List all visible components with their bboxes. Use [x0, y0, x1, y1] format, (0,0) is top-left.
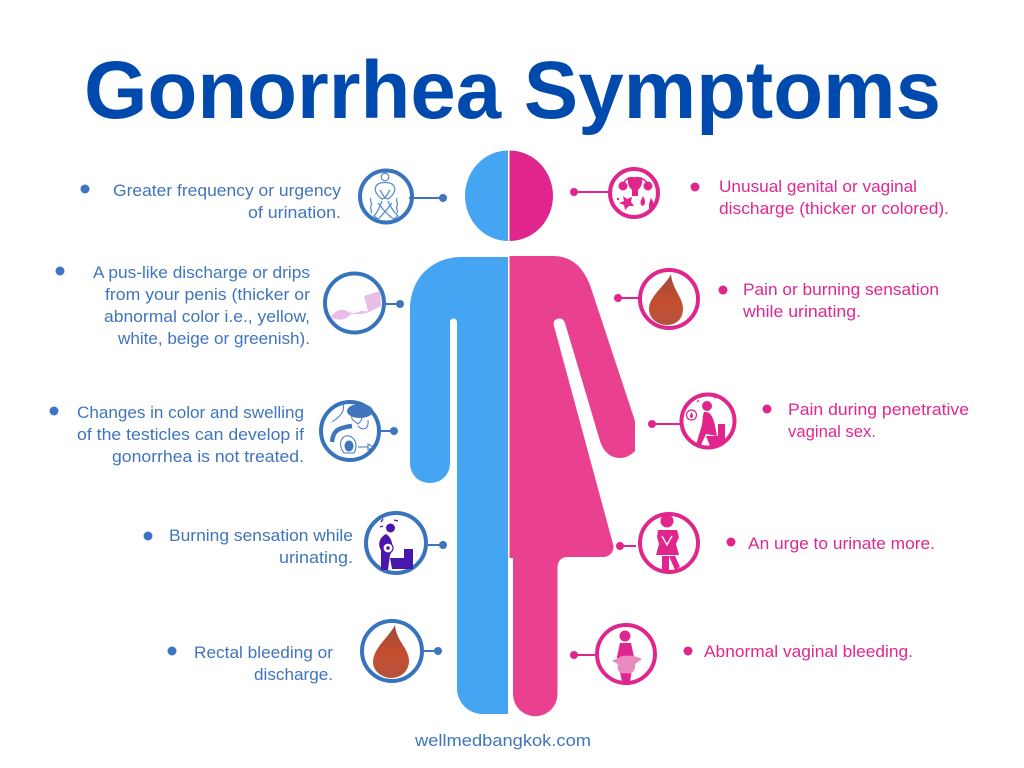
bullet text: vaginal discharge: discharge (thicker or colored).	[719, 199, 949, 218]
title: Gonorrhea Symptoms	[84, 45, 941, 136]
bullet text: urination frequency	[80, 181, 342, 222]
icon: woman on toilet	[648, 394, 734, 448]
bullet text: abnormal bleeding: Abnormal vaginal bleeding.	[704, 642, 913, 661]
bullet text: urination frequency: Greater frequency or urgency	[113, 181, 342, 200]
bullet text: penile discharge	[56, 263, 310, 348]
bullet text: testicle changes: gonorrhea is not treated.	[112, 447, 304, 466]
body: male half	[410, 257, 508, 714]
bullet text: pain during sex	[762, 400, 969, 441]
bullet text: urination frequency: of urination.	[248, 203, 341, 222]
icon: discharge microscopy	[325, 274, 404, 332]
icon: woman holding urge	[616, 514, 698, 572]
website footer: wellmedbangkok.com	[414, 731, 591, 750]
bullet text: vaginal discharge: Unusual genital or vaginal	[719, 177, 917, 196]
head: split circle	[465, 150, 553, 241]
bullet text: penile discharge: abnormal color i.e., yellow,	[104, 307, 310, 326]
body: female half	[510, 256, 635, 716]
bullet text: burning pain: while urinating.	[742, 302, 861, 321]
icon: blood drop (pink ring)	[614, 270, 698, 328]
icon: person at toilet in pain	[366, 513, 447, 573]
bullet text: burning urination: urinating.	[279, 548, 353, 567]
bullet text: penile discharge: from your penis (thicker or	[105, 285, 310, 304]
bullet text: rectal bleeding	[168, 643, 333, 684]
bullet text: pain during sex: Pain during penetrative	[788, 400, 969, 419]
bullet text: vaginal discharge	[690, 177, 949, 218]
bullet text: urge to urinate: An urge to urinate more.	[748, 534, 935, 553]
bullet text: penile discharge: A pus-like discharge or drips	[93, 263, 310, 282]
bullet text: burning urination	[144, 526, 353, 567]
bullet text: rectal bleeding: discharge.	[254, 665, 333, 684]
icon: reproductive organs	[570, 169, 658, 217]
bullet text: testicle changes: Changes in color and swelling	[77, 403, 304, 422]
bullet text: penile discharge: white, beige or greenish).	[117, 329, 310, 348]
icon: blood drop (blue ring)	[362, 621, 442, 681]
bullet text: pain during sex: vaginal sex.	[788, 422, 876, 441]
bullet text: burning pain: Pain or burning sensation	[743, 280, 939, 299]
icon: person crossing legs	[360, 170, 447, 222]
icon: male anatomy	[321, 402, 398, 460]
bullet text: testicle changes	[50, 403, 304, 466]
bullet text: burning urination: Burning sensation while	[169, 526, 353, 545]
bullet text: rectal bleeding: Rectal bleeding or	[194, 643, 333, 662]
icon: woman with bleeding	[570, 625, 655, 683]
bullet text: burning pain	[718, 280, 939, 321]
bullet text: testicle changes: of the testicles can develop if	[77, 425, 304, 444]
